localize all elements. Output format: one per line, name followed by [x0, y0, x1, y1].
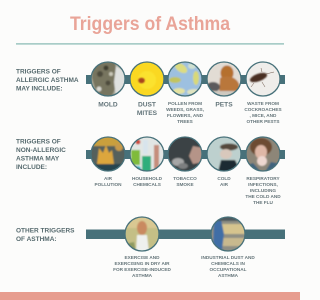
icon: cockroach photo: [245, 61, 281, 97]
labels: allergic triggers: POLLEN FROM: [168, 101, 202, 106]
icon: pets photo: [206, 61, 242, 98]
panel: other triggers row: [86, 216, 285, 252]
labels: non-allergic triggers: AIR: [220, 182, 229, 187]
labels: non-allergic triggers: POLLUTION: [94, 182, 122, 187]
labels: other triggers: ASTHMA: [218, 273, 239, 278]
labels: allergic triggers: [98, 101, 282, 124]
connector bar: [86, 230, 285, 239]
labels: allergic triggers: TREES: [177, 119, 193, 124]
icon: tobacco smoke photo: [167, 136, 203, 172]
labels: other triggers: EXERCISING IN DRY AIR: [114, 261, 170, 266]
title: Triggers of Asthma: [70, 13, 230, 35]
icon: pollen flowers photo: [167, 61, 203, 97]
labels: non-allergic triggers: COLD: [217, 176, 231, 181]
icon: air pollution photo: [90, 136, 126, 172]
labels: allergic triggers: COCKROACHES: [244, 107, 282, 112]
heading: non-allergic triggers: ASTHMA MAY: [16, 156, 60, 162]
heading: other triggers: [16, 228, 75, 243]
labels: non-allergic triggers: HOUSEHOLD: [132, 176, 163, 181]
heading: allergic triggers: [16, 68, 79, 92]
labels: other triggers: EXERCISE AND: [124, 255, 160, 260]
connector bar: [86, 150, 285, 159]
labels: non-allergic triggers: THE COLD AND: [245, 194, 281, 199]
labels: non-allergic triggers: INFECTIONS,: [248, 182, 278, 187]
labels: allergic triggers: MOLD: [98, 102, 118, 108]
labels: allergic triggers: OTHER PESTS: [246, 119, 280, 124]
labels: non-allergic triggers: CHEMICALS: [133, 182, 161, 187]
heading: allergic triggers: ALLERGIC ASTHMA: [16, 77, 79, 84]
labels: allergic triggers: WEEDS, GRASS,: [166, 107, 204, 112]
icon: mold photo: [90, 61, 126, 98]
labels: allergic triggers: , MICE, AND: [250, 113, 277, 118]
labels: non-allergic triggers: TOBACCO: [173, 176, 197, 181]
panel: non-allergic triggers row: [86, 136, 285, 172]
labels: non-allergic triggers: [94, 176, 281, 205]
connector bar: [86, 75, 285, 84]
footer band: [0, 292, 300, 300]
icon: respiratory infection photo: [245, 136, 281, 172]
labels: other triggers: OCCUPATIONAL: [209, 267, 247, 272]
labels: allergic triggers: PETS: [215, 102, 233, 108]
labels: other triggers: [113, 255, 255, 278]
labels: non-allergic triggers: SMOKE: [176, 182, 194, 187]
labels: non-allergic triggers: AIR: [104, 176, 113, 181]
heading: allergic triggers: TRIGGERS OF: [16, 68, 61, 76]
labels: other triggers: CHEMICALS IN: [211, 261, 246, 266]
labels: other triggers: INDUSTRIAL DUST AND: [201, 255, 255, 260]
labels: allergic triggers: FLOWERS, AND: [167, 113, 204, 118]
labels: other triggers: FOR EXERCISE-INDUCED: [113, 267, 172, 272]
labels: allergic triggers: MITES: [137, 110, 158, 117]
labels: allergic triggers: DUST: [138, 102, 156, 108]
icon: dust mite photo: [130, 62, 164, 96]
labels: allergic triggers: WASTE FROM: [247, 101, 279, 106]
heading: non-allergic triggers: [16, 138, 66, 171]
heading: non-allergic triggers: NON-ALLERGIC: [16, 147, 66, 154]
icon: exercise photo: [124, 216, 160, 252]
heading: non-allergic triggers: INCLUDE:: [16, 164, 47, 171]
panel: allergic triggers row: [86, 61, 285, 98]
labels: non-allergic triggers: THE FLU: [253, 200, 274, 205]
labels: non-allergic triggers: RESPIRATORY: [246, 176, 280, 181]
icon: household chemicals photo: [129, 136, 165, 172]
icon: cold air photo: [206, 136, 242, 172]
icon: industrial dust photo: [210, 216, 246, 252]
heading: other triggers: OTHER TRIGGERS: [16, 228, 75, 234]
heading: allergic triggers: MAY INCLUDE:: [16, 86, 63, 92]
labels: non-allergic triggers: INCLUDING: [250, 188, 276, 193]
heading: non-allergic triggers: TRIGGERS OF: [16, 138, 61, 146]
labels: other triggers: ASTHMA: [132, 273, 153, 278]
heading: other triggers: OF ASTHMA:: [16, 236, 57, 243]
